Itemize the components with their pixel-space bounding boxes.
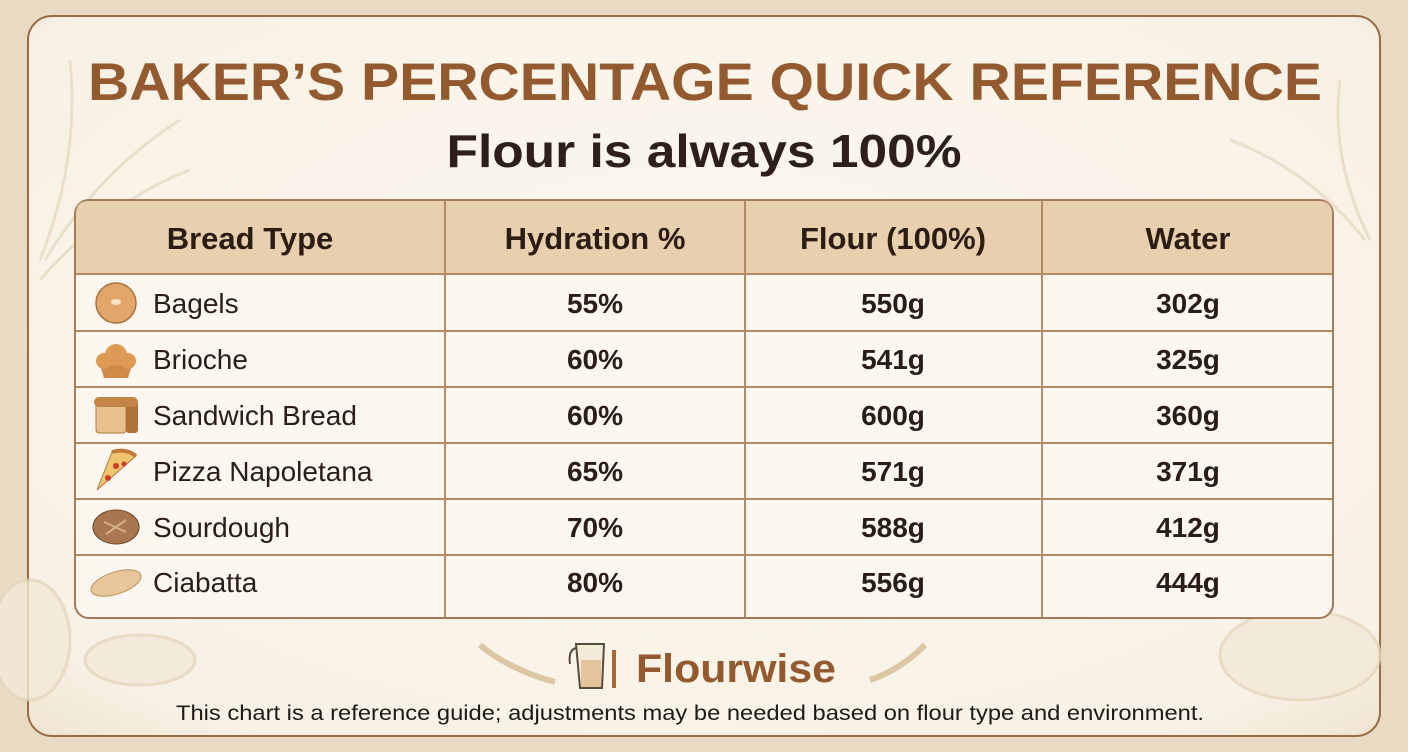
table header: Bread Type xyxy=(167,221,333,256)
title: BAKER’S PERCENTAGE QUICK REFERENCE xyxy=(88,53,1322,112)
table header: Hydration % xyxy=(505,221,685,256)
table rows: 60% xyxy=(567,344,623,375)
icon: wheat right xyxy=(870,645,925,680)
footer note: This chart is a reference guide; adjustments may be needed based on flour type and environment. xyxy=(176,702,1204,725)
table rows: 412g xyxy=(1156,512,1220,543)
table rows: Sandwich Bread xyxy=(153,400,357,431)
table rows: 541g xyxy=(861,344,925,375)
table rows: 55% xyxy=(567,288,623,319)
icon: brioche xyxy=(96,344,136,378)
table header: Flour (100%) xyxy=(800,221,986,256)
icon: ciabatta xyxy=(88,565,144,601)
table rows: 302g xyxy=(1156,288,1220,319)
table rows: 444g xyxy=(1156,567,1220,598)
table rows: 588g xyxy=(861,512,925,543)
table rows: 371g xyxy=(1156,456,1220,487)
icon: pizza slice xyxy=(97,451,136,490)
icon: wheat decoration left xyxy=(0,60,195,700)
table header: Water xyxy=(1146,221,1230,256)
table rows: Sourdough xyxy=(153,512,290,543)
icon: wheat decoration right xyxy=(1220,80,1380,700)
table rows: 556g xyxy=(861,567,925,598)
table rows: 65% xyxy=(567,456,623,487)
table rows: 360g xyxy=(1156,400,1220,431)
icon: sourdough xyxy=(93,510,139,544)
table rows: Brioche xyxy=(153,344,248,375)
subtitle: Flour is always 100% xyxy=(446,125,962,177)
table rows: 600g xyxy=(861,400,925,431)
icon: measuring cup xyxy=(570,644,614,688)
table rows: 571g xyxy=(861,456,925,487)
table rows: 550g xyxy=(861,288,925,319)
table rows xyxy=(153,288,1220,598)
table rows: 60% xyxy=(567,400,623,431)
logo: Flourwise: Flourwise xyxy=(636,647,836,691)
icon: sandwich bread xyxy=(94,397,138,433)
table rows: 70% xyxy=(567,512,623,543)
icon: wheat left xyxy=(480,645,555,682)
table header xyxy=(76,201,1332,273)
logo: Flourwise xyxy=(480,644,925,691)
icon: bagel xyxy=(96,283,136,323)
table rows: 80% xyxy=(567,567,623,598)
table rows: Pizza Napoletana xyxy=(153,456,373,487)
table rows: Ciabatta xyxy=(153,567,258,598)
table rows: Bagels xyxy=(153,288,239,319)
table xyxy=(75,200,1333,618)
table rows: 325g xyxy=(1156,344,1220,375)
